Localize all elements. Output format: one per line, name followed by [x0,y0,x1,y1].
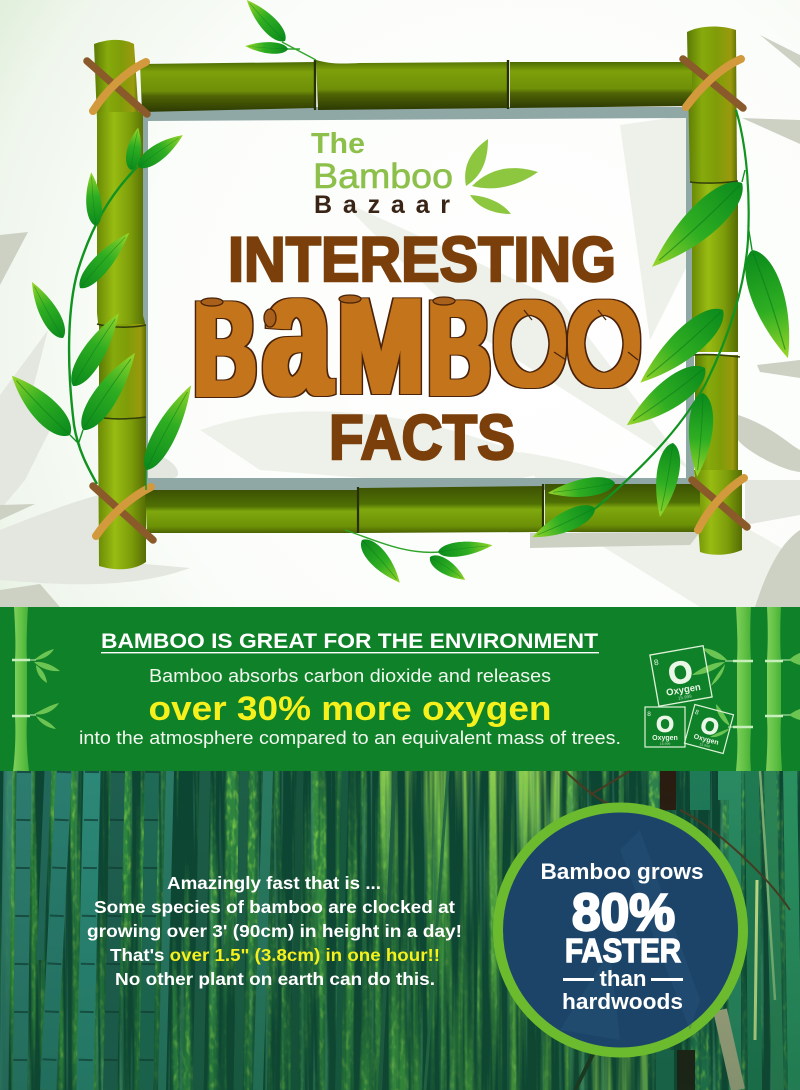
right side stalks [565,771,795,1090]
callout: 80% faster circle: hardwoods [562,989,683,1014]
lashing: top left [87,61,147,114]
highlight: over 30% more oxygen [148,690,552,728]
title: Facts: FACTS [329,403,515,473]
logo: The Bamboo Bazaar [311,128,538,219]
main stalks [4,771,448,1090]
lashing: bottom left [93,486,153,540]
logo: The Bamboo Bazaar: Bamboo [313,157,453,196]
icon: oxygen element small right: O [698,711,722,741]
panel: bamboo forest photo [0,771,800,1090]
body copy: Bamboo absorbs carbon dioxide and releases [149,666,551,686]
vine: top leaves [241,0,316,60]
logo: The Bamboo Bazaar: The [311,128,365,160]
bamboo post: left [94,40,146,569]
heading: BAMBOO IS GREAT FOR THE ENVIRONMENT [101,629,598,653]
faded bamboo leaf shadows [0,35,800,607]
icon: oxygen element small left: Oxygen [652,735,678,742]
text block: fast growth: growing over 3' (90cm) in height in a day! [87,921,462,941]
foliage below circle [590,1050,648,1090]
callout: 80% faster circle [498,808,743,1052]
icon: oxygen element large: Oxygen [665,682,702,699]
icon: oxygen element small right: Oxygen [693,733,719,747]
logo leaves [465,139,538,214]
icon: oxygen element small right [685,705,733,753]
icon: oxygen element large: 8 [653,658,660,667]
callout: 80% faster circle: Bamboo grows [540,859,704,884]
vine: bottom leaves [345,530,493,589]
text block: fast growth [87,873,462,989]
icon: oxygen element small left: O [656,711,674,737]
vine: right [528,110,800,546]
bamboo beam: top [140,60,692,112]
title: Bamboo wooden lettering: O [567,279,641,409]
icon: oxygen element small right: 15.999 [699,742,710,749]
title: Bamboo wooden lettering [194,236,641,432]
big number: 80% [572,884,675,942]
frame inner shadow [141,107,694,490]
title: Bamboo wooden lettering: a [263,236,332,432]
wood grain details [201,295,638,360]
than with rules [563,966,683,991]
bamboo post: right [687,26,742,555]
stalk texture [0,771,800,1090]
text block: fast growth: No other plant on earth can do this. [115,969,435,989]
than with rules: than [600,966,646,991]
band bamboo stalks [12,607,800,771]
logo: The Bamboo Bazaar: Bazaar [314,191,450,219]
body copy: into the atmosphere compared to an equivalent mass of trees. [79,727,621,748]
lashing: bottom right [692,478,747,530]
text block: fast growth: Amazingly fast that is ... [167,873,381,893]
background: top illustration area [0,0,800,607]
vine: left [2,126,201,490]
panel: environment band [0,607,800,771]
title: Bamboo wooden lettering: B [194,273,256,425]
foliage texture [0,771,800,1090]
bamboo beam: bottom [145,484,700,533]
icon: oxygen element small left: 15.999 [660,742,670,746]
icon: oxygen element large: 15.999 [678,693,692,701]
title: Interesting: INTERESTING [228,225,616,295]
callout: 80% faster circle: FASTER [565,932,681,969]
title: Bamboo wooden lettering: O [493,279,567,409]
icon: oxygen element large [650,646,712,706]
title: Bamboo wooden lettering: B [428,272,490,424]
icon: oxygen element small left [645,707,685,747]
panel: bamboo frame [87,26,747,569]
text block: fast growth: That's over 1.5" (3.8cm) in one hour!! [110,945,440,965]
icon: oxygen element small left: 8 [647,711,651,718]
lashing: top right [683,59,743,108]
icon: oxygen element small right: 8 [694,709,700,717]
icon: oxygen element large: O [665,653,695,692]
title: Bamboo wooden lettering: M [338,270,424,422]
text block: fast growth: Some species of bamboo are clocked at [94,897,455,917]
